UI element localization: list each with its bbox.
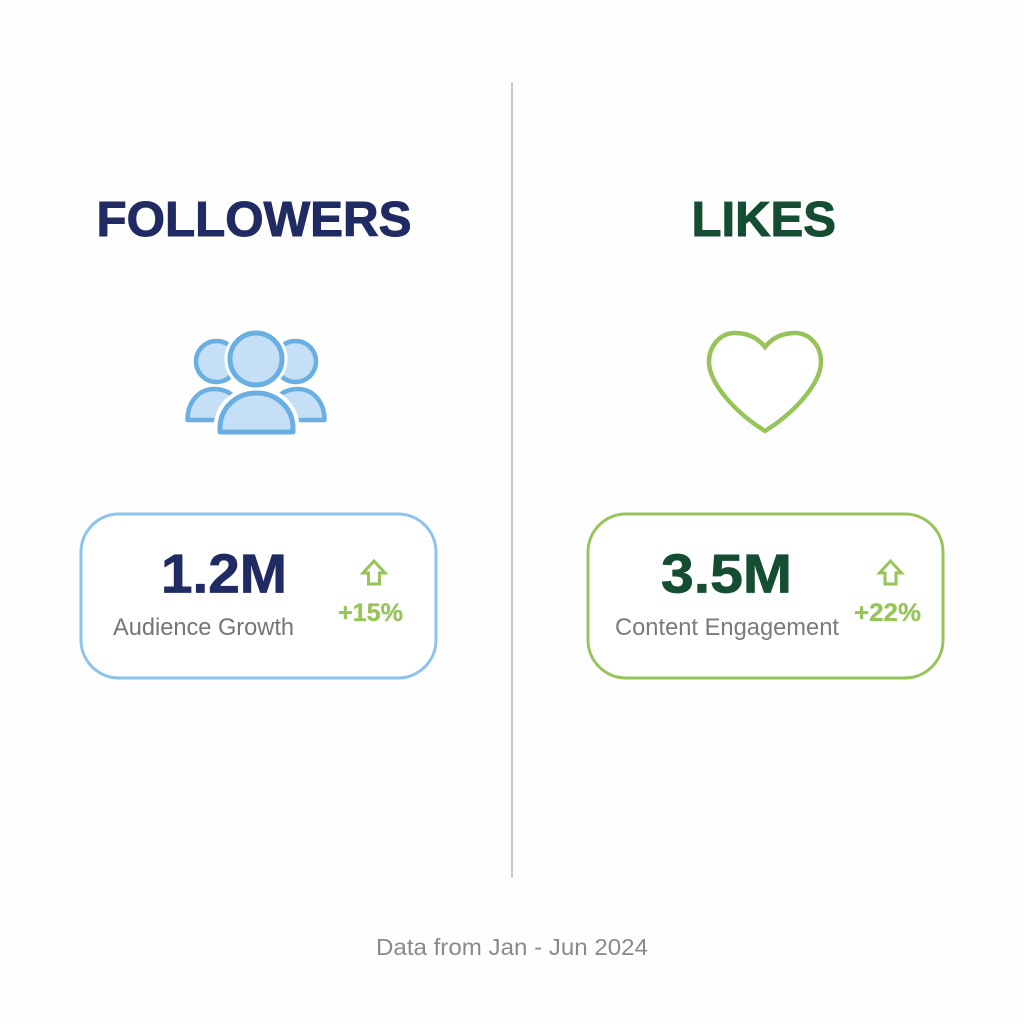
- panel: followers: [81, 192, 436, 678]
- icon: up arrow: [363, 561, 385, 584]
- value: 3.5M: 3.5M: [661, 544, 792, 604]
- label: audience growth: Audience Growth: [113, 614, 294, 641]
- heading: likes: LIKES: [692, 192, 836, 247]
- panel: likes: [588, 192, 943, 678]
- icon: up arrow: [880, 561, 902, 584]
- icon: group of people: [188, 333, 324, 432]
- change: +15%: +15%: [338, 599, 403, 627]
- label: content engagement: Content Engagement: [615, 614, 839, 641]
- heading: followers: FOLLOWERS: [96, 192, 412, 247]
- icon: heart: [709, 333, 821, 431]
- value: 1.2M: 1.2M: [161, 544, 287, 604]
- change: +22%: +22%: [854, 599, 921, 627]
- footer note: Data from Jan - Jun 2024: [376, 934, 648, 960]
- center divider: [511, 82, 513, 878]
- stat card: likes: [588, 514, 943, 678]
- stat card: followers: [81, 514, 436, 678]
